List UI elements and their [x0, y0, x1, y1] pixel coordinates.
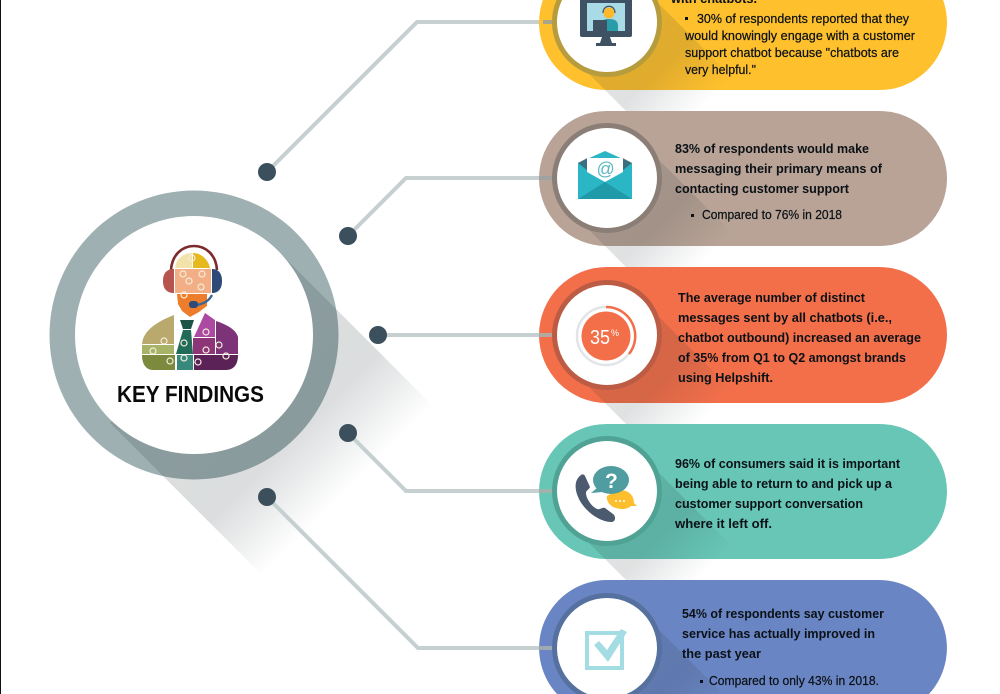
text: messaging primary: Compared to 76% in 2018: [702, 208, 842, 222]
text: chatbots helpful: [670, 0, 915, 77]
text: chatbots helpful: support chatbot because "chatbots are: [685, 46, 899, 60]
connector: orange finding: [378, 333, 552, 337]
chart: 35 percent donut: [577, 307, 635, 365]
icon: puzzle agent with headset: [142, 246, 238, 370]
connector dots: [258, 163, 387, 506]
text: return to conversation: where it left off.: [674, 516, 772, 531]
icon: monitor with agent: [580, 0, 632, 46]
text: return to conversation: being able to return to and pick up a: [675, 476, 893, 491]
icon: checkbox: [587, 629, 627, 668]
text: messaging primary: messaging their primary means of: [675, 161, 883, 176]
text: return to conversation: customer support conversation: [675, 496, 863, 511]
connector lines: [267, 22, 552, 648]
text: chatbots helpful: very helpful.": [685, 63, 756, 77]
panel: chatbots helpful: [539, 0, 947, 215]
text: service improved: 54% of respondents say customer: [682, 606, 884, 621]
icon: phone with speech bubbles: ?: [605, 470, 618, 493]
text: messaging primary: 83% of respondents would make: [675, 141, 869, 156]
text: 35 percent increase: The average number of distinct: [678, 290, 866, 305]
text: 35 percent increase: using Helpshift.: [678, 370, 773, 385]
text: messaging primary: [675, 141, 883, 222]
panel: 35 percent increase: [539, 267, 947, 528]
panel: messaging primary: [539, 111, 947, 371]
panel: return to conversation: [539, 424, 947, 684]
icon: phone with speech bubbles: [576, 466, 637, 522]
icon: email envelope: @: [596, 159, 615, 179]
connector: teal finding: [348, 433, 552, 491]
connector: yellow finding: [267, 22, 552, 172]
text: 35 percent increase: [678, 290, 921, 385]
icon: email envelope: [578, 151, 632, 199]
connector: blue finding: [267, 497, 552, 648]
text: service improved: service has actually improved in: [682, 626, 875, 641]
chart: 35 percent donut: 35: [590, 327, 610, 349]
text: 35 percent increase: chatbot outbound) increased an average: [678, 330, 921, 345]
text: chatbots helpful: would knowingly engage with a customer: [684, 29, 915, 43]
text: service improved: [682, 606, 884, 688]
text: service improved: the past year: [682, 646, 761, 661]
text: return to conversation: [674, 456, 901, 531]
text: 35 percent increase: of 35% from Q1 to Q2 amongst brands: [678, 350, 906, 365]
heading: key findings: KEY FINDINGS: [117, 381, 264, 407]
text: chatbots helpful: 30% of respondents reported that they: [697, 12, 910, 26]
text: messaging primary: contacting customer support: [675, 181, 850, 196]
text: service improved: Compared to only 43% in 2018.: [709, 674, 879, 688]
text: 35 percent increase: messages sent by all chatbots (i.e.,: [678, 310, 892, 325]
panel: key findings hub: [50, 190, 540, 683]
text: return to conversation: 96% of consumers said it is important: [675, 456, 901, 471]
panel: service improved: [539, 580, 947, 694]
chart: 35 percent donut: %: [611, 328, 619, 338]
connector: brown finding: [348, 178, 552, 236]
